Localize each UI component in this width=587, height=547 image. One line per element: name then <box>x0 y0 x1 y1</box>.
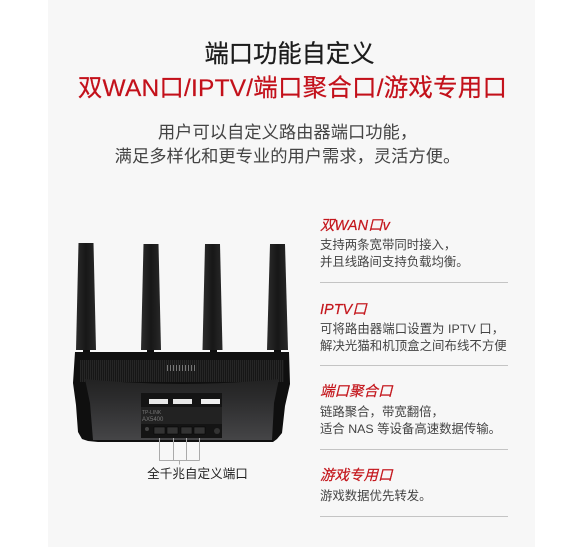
feature: dual WAN: 双WAN口v <box>320 218 390 234</box>
feature: link aggregation: 端口聚合口 <box>320 384 392 400</box>
antennas <box>76 243 288 350</box>
link aggregation description: 链路聚合，带宽翻倍， <box>320 405 444 419</box>
label plate <box>141 393 222 424</box>
intro text <box>115 122 460 166</box>
router body <box>73 352 290 442</box>
intro text: 满足多样化和更专业的用户需求，灵活方便。 <box>115 146 460 166</box>
feature: gaming: 游戏专用口 <box>320 468 392 484</box>
intro text: 用户可以自定义路由器端口功能， <box>158 122 417 142</box>
IPTV description: 可将路由器端口设置为 IPTV 口， <box>320 322 504 336</box>
centre vents <box>167 365 195 371</box>
port bracket lines <box>160 438 200 464</box>
model text: AX5400 <box>142 417 164 423</box>
dual WAN description: 并且线路间支持负载均衡。 <box>320 255 469 269</box>
brand text: TP-LINK <box>142 410 162 416</box>
dual WAN description <box>320 238 469 269</box>
link aggregation description: 适合 NAS 等设备高速数据传输。 <box>320 422 501 436</box>
feature: IPTV: IPTV口 <box>320 302 367 318</box>
gaming description: 游戏数据优先转发。 <box>320 489 432 503</box>
red subtitle: 双WAN口/IPTV/端口聚合口/游戏专用口 <box>78 75 507 102</box>
port caption: 全千兆自定义端口 <box>147 467 248 481</box>
link aggregation description <box>320 405 501 436</box>
IPTV description <box>320 322 507 353</box>
dual WAN description: 支持两条宽带同时接入， <box>320 238 456 252</box>
title: 端口功能自定义 <box>204 41 375 68</box>
router back panel <box>85 379 279 440</box>
antenna hinges <box>83 350 281 360</box>
LAN ports <box>154 427 205 434</box>
IPTV description: 解决光猫和机顶盒之间布线不方便 <box>320 339 507 353</box>
port strip <box>141 424 222 438</box>
